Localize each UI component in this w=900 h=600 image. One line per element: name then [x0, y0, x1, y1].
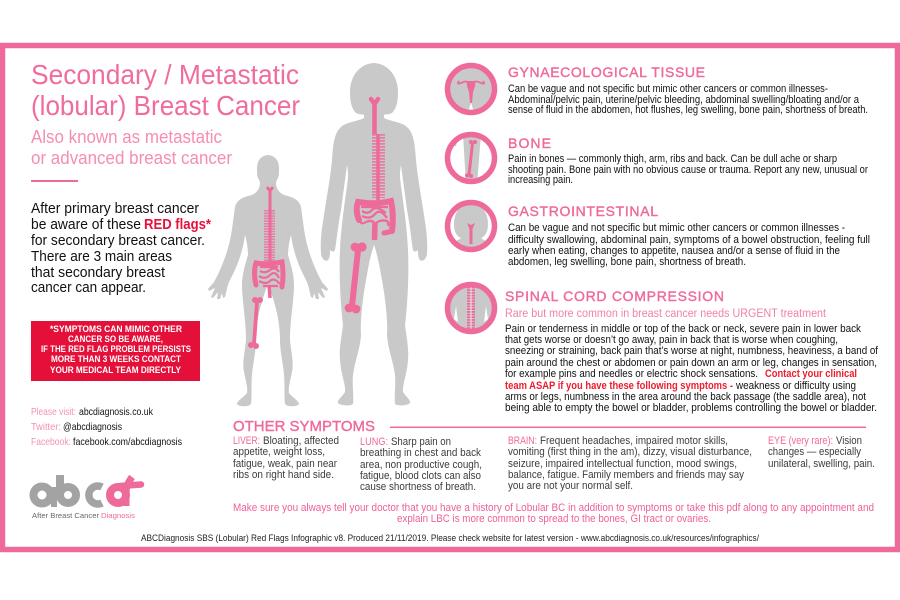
heading: gynaecological tissue: GYNAECOLOGICAL TISSUE: [508, 64, 705, 80]
contact links: [31, 407, 182, 448]
icon: head and throat: [445, 200, 497, 252]
section: spinal cord compression: [505, 288, 879, 414]
text: spinal cord compression: Contact your clinical: [765, 368, 857, 380]
text: brain: BRAIN:: [508, 435, 537, 447]
text: spinal cord compression: for example pins and needles or electric shock sensations.: [505, 368, 758, 380]
doctor notice: explain LBC is more common to spread to the bones, GI tract or ovaries.: [397, 513, 711, 525]
contact links: @abcdiagnosis: [63, 422, 122, 433]
title underline: [31, 180, 78, 182]
text: liver: appetite, weight loss,: [233, 446, 325, 458]
text: gastrointestinal: [508, 222, 870, 268]
text: liver: ribs on right hand side.: [233, 469, 334, 481]
spine: large figure: [371, 99, 378, 200]
text: spinal cord compression: being able to empty the bowel or bladder, problems controlling the bowel or bladder.: [505, 402, 877, 414]
intro paragraph: that secondary breast: [31, 265, 165, 281]
text: spinal cord compression: Pain or tenderness in middle or top of the back or neck, severe pain in lower back: [505, 323, 861, 335]
text: liver: [233, 435, 339, 481]
text: spinal cord compression: weakness or difficulty using: [735, 380, 856, 392]
text: lung: LUNG:: [360, 436, 388, 448]
text: gynaecological tissue: Abdominal/pelvic pain, uterine/pelvic bleeding, abdominal swelling/bloating and/or a: [508, 94, 860, 106]
red warning box: IF THE RED FLAG PROBLEM PERSISTS: [41, 344, 191, 355]
contact links: abcdiagnosis.co.uk: [79, 407, 154, 418]
text: eye: unilateral, swelling, pain.: [768, 458, 875, 470]
other symptoms rule: [390, 426, 866, 428]
text: liver: LIVER:: [233, 435, 260, 447]
section: bone: [508, 135, 868, 186]
intro paragraph: There are 3 main areas: [31, 249, 172, 265]
subtitle: [31, 127, 232, 168]
text: eye: [768, 435, 875, 470]
heading: other symptoms: OTHER SYMPTOMS: [233, 418, 375, 435]
text: spinal cord compression: that gets worse or doesn’t go away, pain in back that is worse when coughing,: [505, 334, 838, 346]
abc logo: [32, 475, 141, 520]
text: spinal cord compression: arms or legs, numbness in the area around the back passage (the saddle area), not: [505, 391, 866, 403]
intro paragraph: RED flags*: [144, 217, 211, 233]
contact links: Facebook:: [31, 437, 71, 448]
text: eye: changes — especially: [768, 446, 861, 458]
section: gastrointestinal: [508, 203, 870, 268]
section: gynaecological tissue: [508, 64, 868, 116]
text: lung: [360, 436, 482, 493]
red warning box: [31, 321, 200, 381]
text: liver: fatigue, weak, pain near: [233, 458, 337, 470]
intro paragraph: cancer can appear.: [31, 280, 146, 296]
red warning box: YOUR MEDICAL TEAM DIRECTLY: [50, 365, 182, 376]
text: bone: Pain in bones — commonly thigh, arm, ribs and back. Can be dull ache or sharp: [508, 153, 837, 165]
footer note: ABCDiagnosis SBS (Lobular) Red Flags Infographic v8. Produced 21/11/2019. Please check website for latest version - www.abcdiagnosis.co.uk/resources/infographics/: [141, 533, 759, 543]
text: lung: breathing in chest and back: [360, 447, 481, 459]
icon: spine: [448, 284, 494, 332]
text: gynaecological tissue: [508, 83, 868, 116]
text: eye: EYE (very rare):: [768, 435, 833, 447]
text: liver: Bloating, affected: [263, 435, 339, 447]
femur: large figure: [345, 242, 367, 313]
contact links: facebook.com/abcdiagnosis: [73, 437, 182, 448]
intro paragraph: be aware of these: [31, 217, 141, 233]
text: spinal cord compression: team ASAP if you have these following symptoms -: [505, 380, 733, 392]
text: brain: [508, 435, 752, 492]
text: gastrointestinal: difficulty swallowing, abdominal pain, symptoms of a bowel obstruction, feeling full: [508, 234, 870, 246]
subtitle: Also known as metastatic: [31, 127, 222, 147]
large body figure: [321, 63, 427, 405]
text: brain: vomiting (first thing in the am), dizzy, visual disturbance,: [508, 446, 752, 458]
text: gastrointestinal: Can be vague and not specific but mimic other cancers or common illnesses -: [508, 222, 845, 234]
text: spinal cord compression: [505, 323, 879, 414]
heading: gastrointestinal: GASTROINTESTINAL: [508, 203, 658, 219]
heading: spinal cord compression: SPINAL CORD COMPRESSION: [505, 288, 724, 304]
text: brain: Frequent headaches, impaired motor skills,: [540, 435, 728, 447]
text: brain: seizure, impaired intellectual function, mood swings,: [508, 458, 737, 470]
heading: bone: BONE: [508, 135, 551, 151]
intro paragraph: [31, 201, 211, 296]
icon: uterus: [448, 66, 494, 112]
spine: small figure: [267, 187, 273, 262]
icon: bone: [445, 132, 497, 185]
text: eye: Vision: [836, 435, 862, 447]
text: lung: cause shortness of breath.: [360, 481, 476, 493]
red warning box: MORE THAN 3 WEEKS CONTACT: [51, 354, 181, 365]
contact links: Twitter:: [31, 422, 61, 433]
subtitle: or advanced breast cancer: [31, 148, 232, 168]
intro paragraph: After primary breast cancer: [31, 201, 199, 217]
text: lung: area, non productive cough,: [360, 459, 482, 471]
silhouette: large figure: [321, 63, 427, 405]
text: gynaecological tissue: Can be vague and not specific but mimic other cancers or common illnesses-: [508, 83, 828, 95]
contact links: Please visit:: [31, 407, 76, 418]
title: [31, 59, 300, 121]
title: (lobular) Breast Cancer: [31, 90, 300, 121]
red warning box: CANCER SO BE AWARE,: [68, 334, 163, 345]
doctor notice: [233, 502, 874, 525]
small body figure: [208, 155, 328, 406]
text: bone: [508, 153, 868, 186]
red warning box: *SYMPTOMS CAN MIMIC OTHER: [50, 324, 182, 335]
text: gastrointestinal: early when eating, changes to appetite, nausea and/or a sense of fluid in the: [508, 245, 840, 257]
subheading: urgent treatment: Rare but more common in breast cancer needs URGENT treatment: [505, 308, 827, 320]
intestines: small figure: [254, 262, 283, 298]
title: Secondary / Metastatic: [31, 59, 299, 90]
silhouette: small figure: [208, 155, 328, 406]
text: bone: increasing pain.: [508, 174, 573, 186]
text: brain: balance, fatigue. Family members and friends may say: [508, 469, 744, 481]
abc logo: After Breast Cancer: [32, 511, 100, 520]
text: gastrointestinal: abdomen, leg swelling, bone pain, shortness of breath.: [508, 256, 746, 268]
intro paragraph: for secondary breast cancer.: [31, 233, 205, 249]
intestines: large figure: [357, 201, 393, 240]
abc logo: Diagnosis: [101, 511, 135, 520]
femur: small figure: [248, 297, 263, 349]
text: brain: you are not your normal self.: [508, 480, 633, 492]
text: lung: Sharp pain on: [391, 436, 451, 448]
text: lung: fatigue, blood clots can also: [360, 470, 481, 482]
